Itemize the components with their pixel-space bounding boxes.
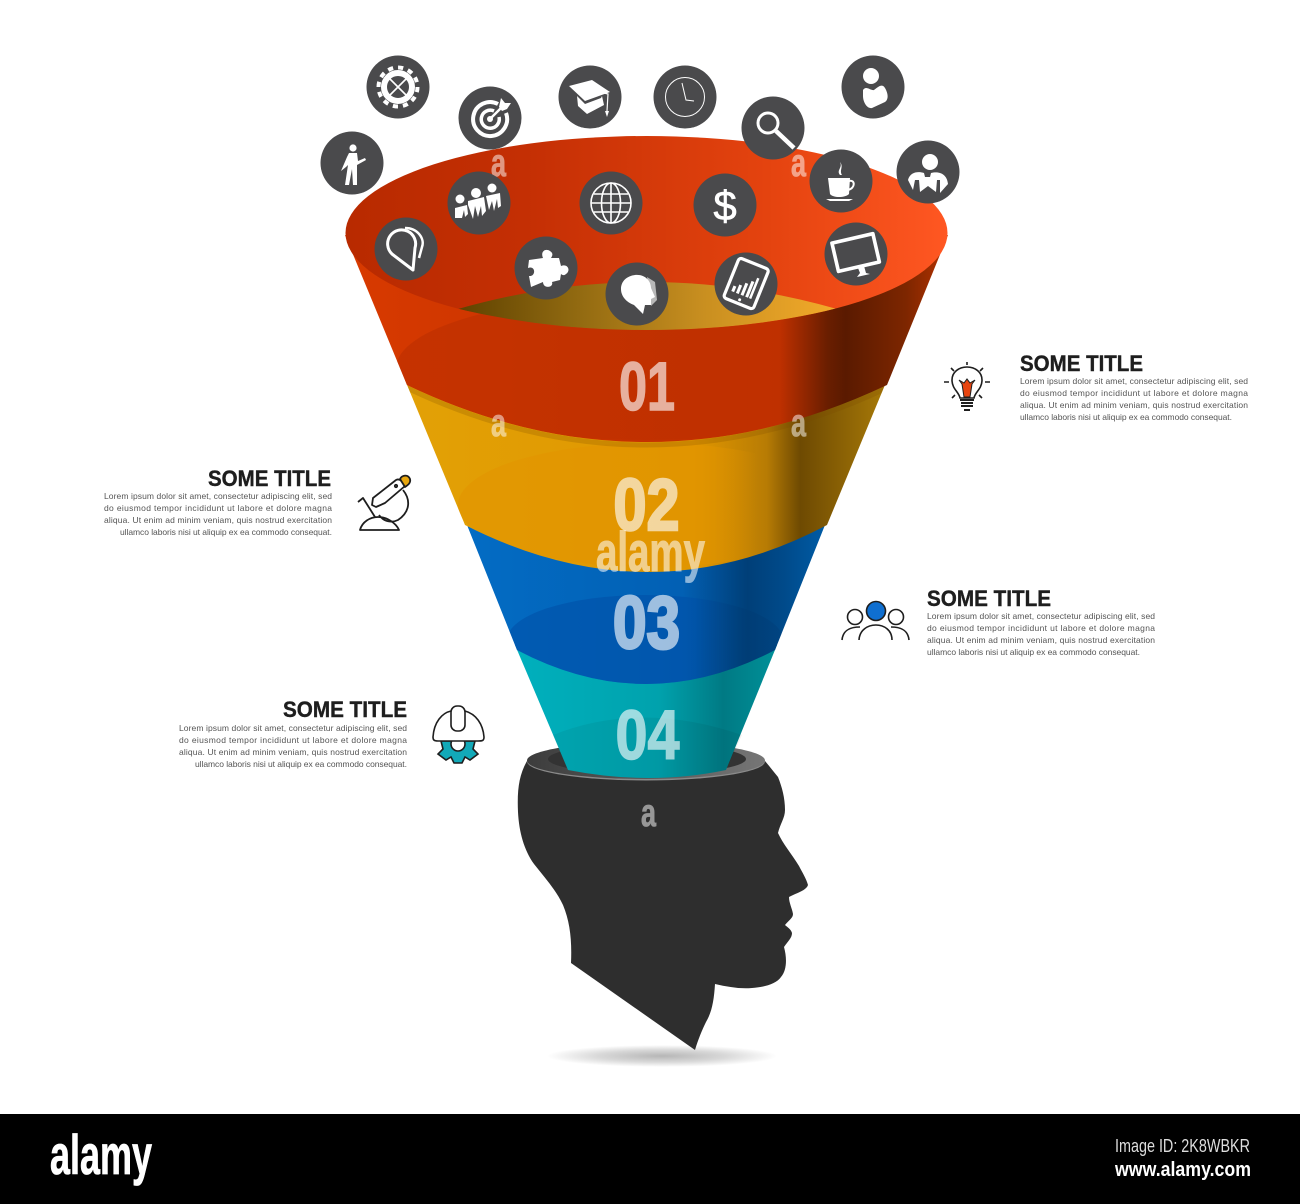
heading: SOME TITLE [283,697,407,722]
body: ullamco laboris nisi ut aliquip ex ea commodo consequat. [1020,412,1232,422]
text block: top right [1020,351,1248,422]
body [104,491,332,537]
body: do eiusmod tempor incididunt ut labore et dolore magna [104,503,332,513]
number 03: 03 [613,581,680,664]
icon: location pins [374,218,438,280]
icon: team [448,172,510,234]
body: aliqua. Ut enim ad minim veniam, quis nostrud exercitation [104,515,332,525]
footer logo: alamy [50,1123,152,1186]
head ground shadow [547,1045,777,1067]
body [927,611,1155,657]
body: do eiusmod tempor incididunt ut labore et dolore magna [179,735,407,745]
body: ullamco laboris nisi ut aliquip ex ea commodo consequat. [120,527,332,537]
head opening rim [527,742,765,780]
icon: monitor [824,222,888,286]
icon: target [458,86,522,150]
body: Lorem ipsum dolor sit amet, consectetur adipiscing elit, sed [927,611,1155,621]
body: Lorem ipsum dolor sit amet, consectetur adipiscing elit, sed [1020,376,1248,386]
head silhouette [518,742,808,1050]
body: do eiusmod tempor incididunt ut labore et dolore magna [927,623,1155,633]
watermark letters: a [791,142,806,185]
body: aliqua. Ut enim ad minim veniam, quis nostrud exercitation [179,747,407,757]
inner gold hole [458,282,837,330]
icon: clock [654,66,716,128]
body: ullamco laboris nisi ut aliquip ex ea commodo consequat. [195,759,407,769]
icon: head profile [606,262,668,326]
body [179,723,407,769]
watermark letters: a [491,142,506,185]
heading: SOME TITLE [208,466,331,491]
body: ullamco laboris nisi ut aliquip ex ea commodo consequat. [927,647,1140,657]
band 04 teal [515,645,777,778]
number 01: 01 [619,348,675,425]
body: Lorem ipsum dolor sit amet, consectetur adipiscing elit, sed [179,723,407,733]
icon: coffee [810,150,872,212]
body: Lorem ipsum dolor sit amet, consectetur adipiscing elit, sed [104,491,332,501]
footer bar [0,1114,1300,1204]
watermark letters: a [791,402,806,445]
band 02 yellow [405,380,887,572]
icon: microscope [358,476,410,530]
icon: tablet chart [714,252,778,316]
watermark letters: a [641,792,656,835]
icon: user [842,56,904,118]
icon: presenter [320,132,384,194]
funnel top opening [346,136,948,330]
band 03 blue [465,520,827,685]
text block: lower left [179,697,407,769]
body: aliqua. Ut enim ad minim veniam, quis nostrud exercitation [1020,400,1248,410]
funnel [345,136,948,778]
band 01 red [345,235,948,442]
body [1020,376,1248,422]
icon: people [842,602,909,640]
website: www.alamy.com [1114,1159,1251,1181]
icon: dollar: $ [713,182,737,229]
watermark [491,142,806,835]
icon: light bulb [944,362,990,410]
watermark letters: a [491,402,506,445]
heading: SOME TITLE [1020,351,1143,376]
icon: gear [366,56,430,118]
icon: businessman [896,140,960,204]
icon circles [320,56,960,326]
text block: middle right [927,586,1155,657]
image id: Image ID: 2K8WBKR [1115,1136,1250,1156]
icon: dollar [694,174,756,236]
icon: helmet and gear [433,706,484,763]
body: do eiusmod tempor incididunt ut labore et dolore magna [1020,388,1248,398]
icon: magnifier [742,96,804,160]
body: aliqua. Ut enim ad minim veniam, quis nostrud exercitation [927,635,1155,645]
number 02: 02 [614,465,680,546]
icon: puzzle [514,236,578,300]
icon: globe [580,172,642,234]
heading: SOME TITLE [927,586,1051,611]
icon: graduation cap [558,66,622,128]
watermark wordmark: alamy [596,520,705,583]
watermark letters [491,142,806,835]
text block: upper left [104,466,332,537]
number 04: 04 [616,696,680,774]
